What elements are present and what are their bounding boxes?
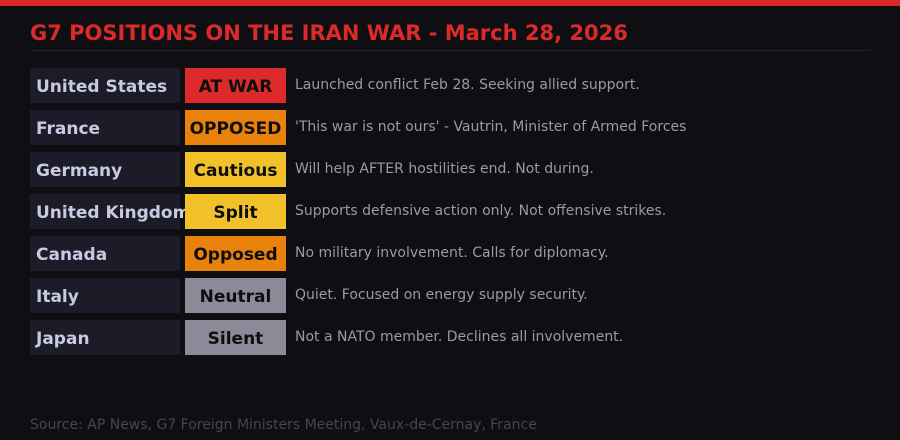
row: Germany: Cautious [194,161,277,181]
row: Italy: Neutral [200,287,271,307]
row: Italy: Italy [36,287,79,307]
row: France: OPPOSED [190,119,281,139]
row: United States: United States [36,77,167,97]
row: United Kingdom: Supports defensive action only. Not offensive strikes. [295,203,666,219]
row: United Kingdom [30,194,666,229]
row: Italy: Quiet. Focused on energy supply security. [295,287,588,303]
row: Canada: No military involvement. Calls for diplomacy. [295,245,609,261]
row: United States: AT WAR [199,77,272,97]
row: Germany [30,152,594,187]
row: Germany: Germany [36,161,122,181]
row: United States [30,68,640,103]
row: France: 'This war is not ours' - Vautrin, Minister of Armed Forces [295,119,686,135]
row: Japan: Silent [208,329,263,349]
row: France: France [36,119,100,139]
row: Japan [30,320,623,355]
row: United Kingdom: United Kingdom [36,203,190,223]
row: Japan: Not a NATO member. Declines all involvement. [295,329,623,345]
row: Canada: Canada [36,245,107,265]
source footer: Source: AP News, G7 Foreign Ministers Meeting, Vaux-de-Cernay, France [30,417,537,433]
row: United Kingdom: Split [213,203,258,223]
row: Canada: Opposed [193,245,278,265]
row: France [30,110,686,145]
row: Japan: Japan [36,329,90,349]
row: Canada [30,236,609,271]
row: Italy [30,278,588,313]
title: G7 POSITIONS ON THE IRAN WAR - March 28, 2026 [30,21,628,45]
row: Germany: Will help AFTER hostilities end. Not during. [295,161,594,177]
row: United States: Launched conflict Feb 28. Seeking allied support. [295,77,640,93]
